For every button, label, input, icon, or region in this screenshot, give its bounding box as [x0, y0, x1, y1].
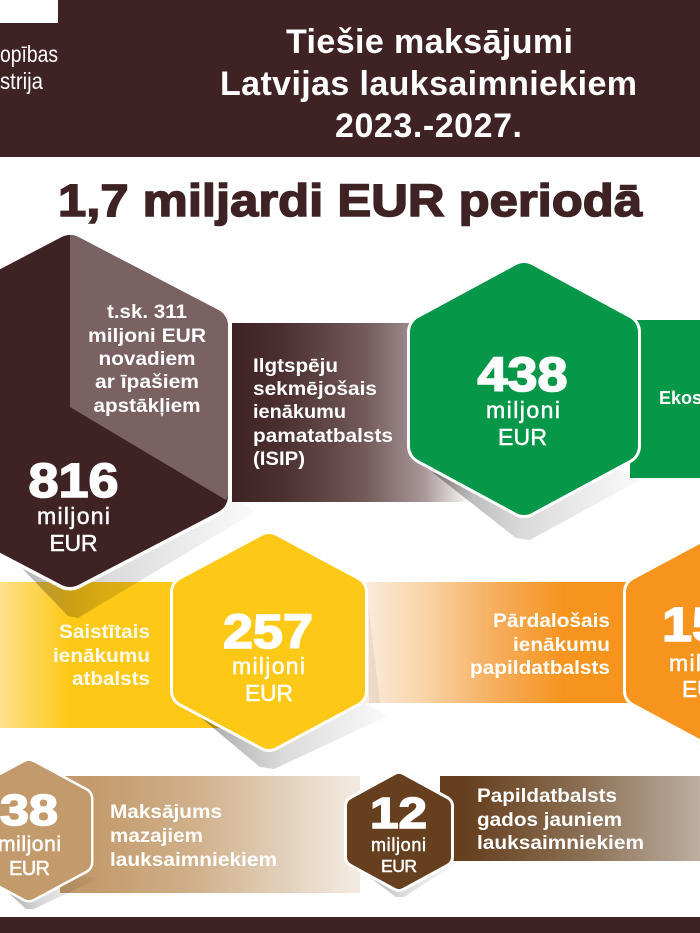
heading: total amount: 1,7 miljardi EUR periodā [58, 175, 643, 226]
hexagon fill [0, 253, 210, 569]
sector text: ar īpašiem [95, 371, 199, 393]
amount 38 [0, 786, 61, 880]
fill [187, 548, 351, 735]
logo white block [0, 0, 58, 23]
outline [187, 548, 351, 735]
shadow: 257 hexagon right side [369, 610, 380, 703]
young farmers label: gados jauniem [477, 809, 622, 831]
bar: redistributive support [360, 582, 640, 703]
sector text [88, 301, 206, 417]
coupled support label: atbalsts [72, 668, 150, 690]
hexagon: redistributive support [640, 548, 700, 735]
title [220, 23, 637, 145]
hexagon: young farmers 12 [355, 782, 443, 881]
bar: young farmers [440, 776, 700, 861]
shadow: 257 hexagon [200, 695, 388, 769]
shadow: 816 hexagon [0, 490, 255, 618]
amount, cut off at the page edge [662, 599, 700, 702]
amount 438 [478, 349, 568, 450]
hexagon: direct income support 816 [0, 235, 228, 569]
hexagon: eco schemes 438 [426, 279, 622, 499]
shadow: 38 hexagon [0, 875, 100, 909]
bar: small farmers [60, 776, 360, 893]
bar: eco schemes [630, 320, 700, 478]
amount 12: EUR [381, 856, 417, 876]
amount 816: 816 [28, 455, 118, 508]
amount 12: 12 [370, 789, 427, 838]
logo text: opības [0, 41, 58, 67]
shadow: 438 hexagon [432, 465, 640, 540]
amount 257: miljoni [232, 653, 305, 679]
coupled support label: Saistītais [59, 621, 150, 643]
amount 816: miljoni [37, 503, 110, 529]
shadow: 12 hexagon [360, 862, 458, 897]
hexagon outline [0, 253, 210, 569]
sector text: novadiem [98, 348, 196, 370]
logo text: strija [0, 68, 43, 94]
amount 12 [370, 789, 427, 876]
footer band [0, 917, 700, 933]
fill [355, 782, 443, 881]
bar: ISIP [232, 323, 472, 502]
coupled support label [53, 621, 150, 690]
amount 438: 438 [478, 349, 568, 402]
amount 257: 257 [223, 606, 313, 659]
outline [640, 548, 700, 735]
amount 12: miljoni [371, 835, 426, 855]
ISIP label: sekmējošais [253, 378, 377, 400]
logo text [0, 41, 58, 94]
redistributive support label: Pārdalošais [493, 610, 610, 632]
outline [355, 782, 443, 881]
amount 438: miljoni [486, 397, 560, 423]
coupled support label: ienākumu [53, 645, 150, 667]
ISIP label: pamatatbalsts [253, 425, 393, 447]
sector text: apstākļiem [94, 395, 200, 417]
hexagon: small farmers 38 [0, 771, 81, 890]
outline [0, 771, 81, 890]
fill [640, 548, 700, 735]
redistributive support label: papildatbalsts [470, 657, 610, 679]
young farmers label: Papildatbalsts [477, 785, 617, 807]
sector text: miljoni EUR [88, 325, 206, 347]
young farmers label [477, 785, 644, 854]
ISIP label [253, 355, 393, 470]
redistributive support label: ienākumu [513, 634, 610, 656]
hexagon: coupled support 257 [187, 548, 351, 735]
young farmers label: lauksaimniekiem [477, 832, 644, 854]
title: Tiešie maksājumi [286, 23, 573, 61]
amount 438: EUR [498, 424, 547, 450]
ISIP label: (ISIP) [253, 448, 305, 470]
shadow: 158 hexagon [648, 703, 700, 746]
fill [426, 279, 622, 499]
outline [426, 279, 622, 499]
highlighted sector [70, 235, 228, 500]
redistributive support label [470, 610, 610, 679]
small farmers label [110, 801, 277, 871]
ISIP label: ienākumu [253, 401, 346, 423]
title: Latvijas lauksaimniekiem [220, 65, 637, 103]
title: 2023.-2027. [335, 107, 522, 145]
small farmers label: Maksājums [110, 801, 222, 823]
sector text: t.sk. 311 [107, 301, 187, 323]
amount 816 [28, 455, 118, 556]
fill [0, 771, 81, 890]
bar: coupled support [0, 582, 230, 728]
amount 38: EUR [9, 858, 50, 880]
amount 816: EUR [50, 530, 98, 556]
small farmers label: lauksaimniekiem [110, 849, 277, 871]
header band [0, 0, 700, 157]
small farmers label: mazajiem [110, 825, 203, 847]
amount 38: 38 [0, 786, 58, 835]
amount 257 [223, 606, 313, 706]
ISIP label: Ilgtspēju [253, 355, 338, 377]
amount 257: EUR [245, 680, 293, 706]
